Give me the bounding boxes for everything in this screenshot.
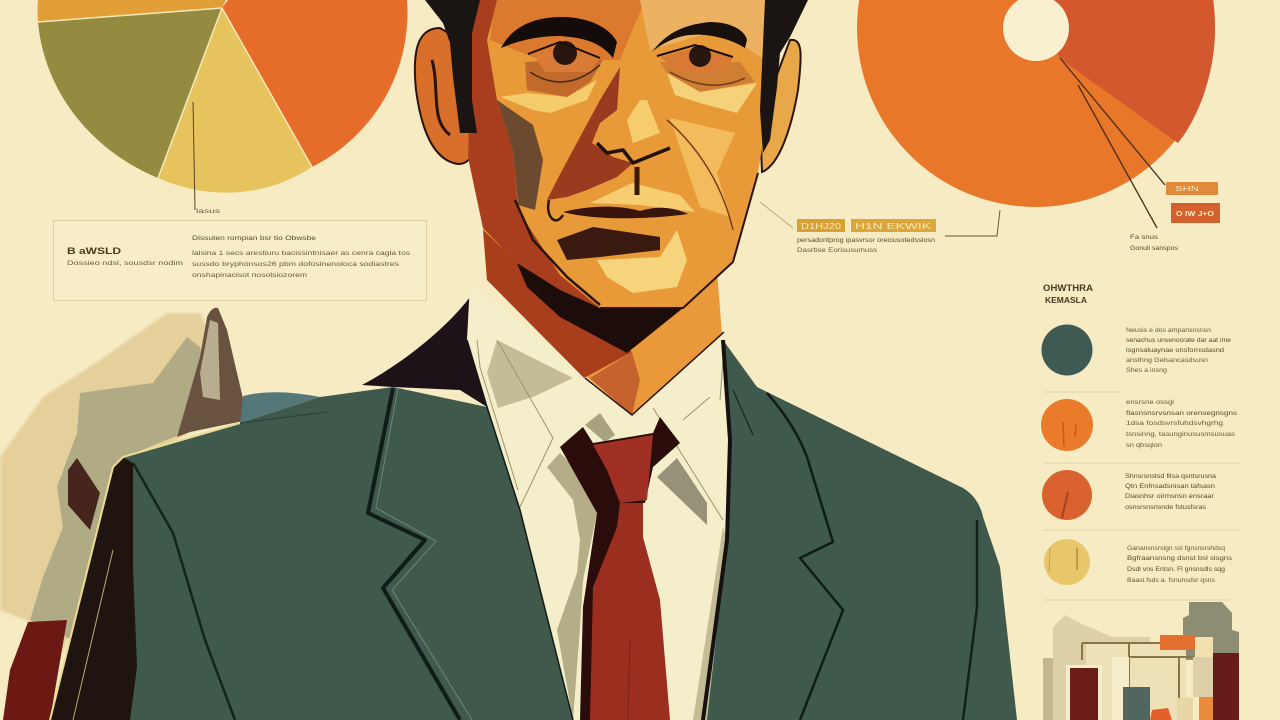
left text panel: [54, 220, 426, 300]
cream shoulder piping: [50, 423, 240, 720]
donut callout labels: SHN: [1175, 186, 1199, 193]
ears: [415, 28, 801, 172]
centre callout labels: persadoritprog ipasvrsor oreciusotedsslosn: [797, 237, 935, 244]
under chin shadow: [517, 263, 683, 353]
donut callout labels: Fa snus: [1130, 234, 1159, 241]
shirt: [467, 282, 730, 720]
legend item: orange: flasnsnsrvsnsan orensegnsgns: [1126, 410, 1238, 417]
teal hill: [240, 392, 320, 423]
legend item: orange: [1041, 399, 1238, 451]
legend item: green: Shes a insng: [1126, 367, 1167, 374]
nose outline: [597, 143, 670, 163]
left jacket front edge: [467, 340, 573, 720]
collar lines: [477, 340, 723, 520]
under eye right: [660, 62, 755, 92]
neck: [483, 228, 724, 415]
left fold: [515, 200, 600, 305]
mouth line: [563, 207, 688, 218]
tie knot dark: [560, 417, 680, 720]
brown cheek shadow: [497, 100, 543, 210]
jacket seams: [133, 463, 235, 720]
legend heading: [1043, 283, 1094, 305]
legend item: orange: tsnsinng, tasunginususmsusuas: [1126, 431, 1236, 438]
hair: [425, 0, 808, 153]
chin highlight: [597, 230, 687, 293]
right donut chart: [857, 0, 1215, 228]
left lapel outline: [368, 388, 460, 720]
upper lip highlight: [590, 183, 695, 212]
legend item: green: senachus unsenosrate dar aat ime: [1126, 337, 1231, 344]
centre callout labels: H1N EKWIK: [855, 222, 932, 231]
dark upper collar: [362, 297, 487, 407]
right grey fold: [657, 458, 707, 525]
legend item: yellow: [1044, 539, 1233, 585]
legend item: green: ansthng Gelsancasdsusn: [1126, 357, 1208, 364]
right lapel outline: [767, 393, 843, 720]
left pie chart: [38, 0, 407, 215]
left text panel: B aWSLD: [67, 246, 122, 256]
eyebrows: [501, 17, 617, 58]
right cheek highlight: [667, 73, 757, 113]
dark left sleeve: [50, 457, 137, 720]
nose highlight: [627, 100, 660, 143]
pie leader line and label: [193, 102, 221, 215]
lower lip shadow: [557, 227, 660, 260]
legend item: red orange: osnsrsnsnsnde fstusfsras: [1125, 504, 1207, 511]
legend item: green: lsgnsaluaynae onsfornsdasnd: [1126, 347, 1224, 354]
right eye: [657, 45, 745, 85]
left background landscape: [0, 308, 320, 720]
donut callout labels: Gonuli sanspos: [1130, 245, 1179, 252]
face: [468, 0, 770, 308]
jacket: [50, 297, 1017, 720]
left text panel: Dissuten rompian bsr tio Obwsbe: [192, 235, 316, 242]
centre callout labels: Dasrbse Eorisusumuss: [797, 247, 878, 254]
left text panel: sussdo bryphonsos26 pbm dofosinenoloca sodiastres: [192, 261, 400, 268]
under eye left: [525, 60, 603, 97]
forehead: [490, 0, 645, 60]
donut callout labels: O IW J+O: [1176, 209, 1214, 218]
left text panel: Dossieo ndsl, sousdsr nodim: [67, 260, 183, 267]
right jacket front edge: [703, 340, 730, 720]
left shadow: [468, 0, 600, 308]
left cheek highlight: [500, 80, 597, 113]
small dark object: [68, 458, 100, 530]
sleeve seam: [963, 520, 977, 720]
tie knot: [593, 435, 653, 503]
left grey fold: [547, 453, 597, 720]
right legend list: [1041, 283, 1240, 600]
legend item: red orange: Qtn Enfnsadsnisan tafsasn: [1125, 483, 1215, 490]
centre callout labels: D1HJ20: [801, 222, 842, 231]
donut leader lines: [1060, 58, 1165, 228]
collar shadow: [487, 340, 573, 408]
legend item: yellow: Dsdl vns Entsn. Fl gnsnsdls sqg: [1127, 566, 1225, 573]
dark red block: [3, 620, 67, 720]
legend item: yellow: Baasl.fsds a. fsnunsdsr qsns: [1127, 577, 1216, 584]
legend item: orange: 1dsa fosdsvrsfuhdsvhgrhg: [1126, 420, 1223, 427]
bars: [1066, 635, 1239, 720]
brown spire: [177, 308, 248, 437]
collar button: [585, 413, 615, 442]
left text panel: lalsina 1 secs arestiuru bacissintnisaer as cenra cagla tos: [192, 250, 411, 257]
legend heading: OHWTHRA: [1043, 283, 1094, 293]
tie: [560, 417, 680, 720]
legend item: red orange: Diasnhsr oirmsnsn ensraar: [1125, 493, 1215, 500]
legend item: red orange: [1042, 470, 1216, 520]
legend item: yellow: Bgfraansnsng dsnst bsl slsgns: [1127, 555, 1233, 562]
legend item: yellow: Ganansnsrslgn ssl fgnsnsrshdsq: [1127, 545, 1225, 552]
nose shadow: [547, 67, 633, 200]
legend item: orange: sn qbsqlon: [1126, 442, 1162, 449]
right lower cheek highlight: [670, 118, 735, 217]
centre callout labels: [760, 202, 1000, 254]
donut callout labels: [1130, 182, 1220, 252]
legend item: green: [1042, 324, 1231, 376]
neck lighter fold: [590, 352, 640, 415]
left eye: [528, 41, 600, 82]
pie leader line and label: lasus: [196, 208, 221, 215]
left text panel: onshapinacisot nosolsiozorem: [192, 272, 307, 279]
legend item: green: Neusis e dos ampansnsnsn: [1126, 327, 1211, 334]
bottom right city block chart: [1043, 602, 1239, 720]
legend item: red orange: Shnsrsnstsd filsa qsntsrusna: [1125, 473, 1216, 480]
face base: [468, 0, 770, 308]
legend heading: KEMASLA: [1045, 296, 1087, 305]
legend item: orange: ensrsne ossgl: [1126, 399, 1175, 406]
chin and jaw line: [600, 173, 758, 308]
